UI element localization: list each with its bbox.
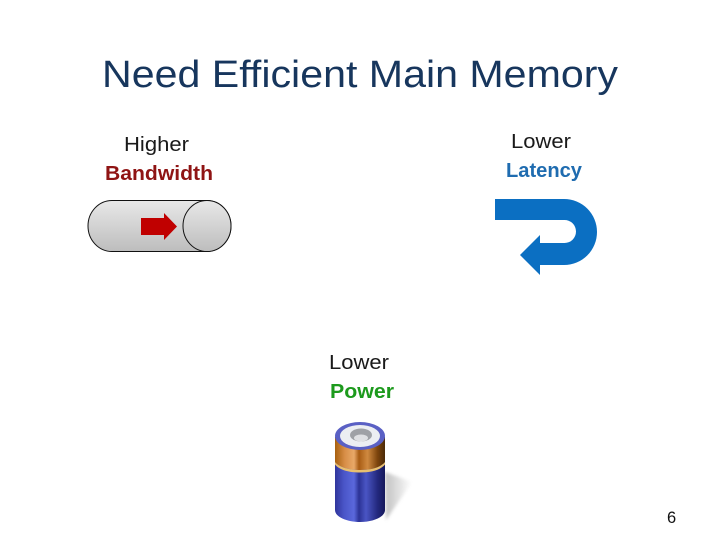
icon: latency u-turn arrow bbox=[495, 199, 597, 275]
label: lower power: Lower bbox=[329, 351, 389, 374]
label: higher bandwidth bbox=[105, 133, 213, 185]
icon: red arrow bbox=[141, 213, 177, 240]
label: lower power bbox=[329, 351, 394, 403]
icon: bandwidth cylinder bbox=[88, 200, 231, 252]
page number: 6 bbox=[667, 509, 676, 527]
label: higher bandwidth: Higher bbox=[124, 133, 189, 156]
label: lower power: Power bbox=[330, 380, 394, 403]
icon: battery bbox=[335, 422, 412, 522]
label: lower latency bbox=[506, 130, 583, 182]
title: Need Efficient Main Memory bbox=[102, 54, 618, 96]
label: higher bandwidth: Bandwidth bbox=[105, 162, 213, 185]
label: lower latency: Latency bbox=[506, 159, 583, 182]
label: lower latency: Lower bbox=[511, 130, 571, 153]
